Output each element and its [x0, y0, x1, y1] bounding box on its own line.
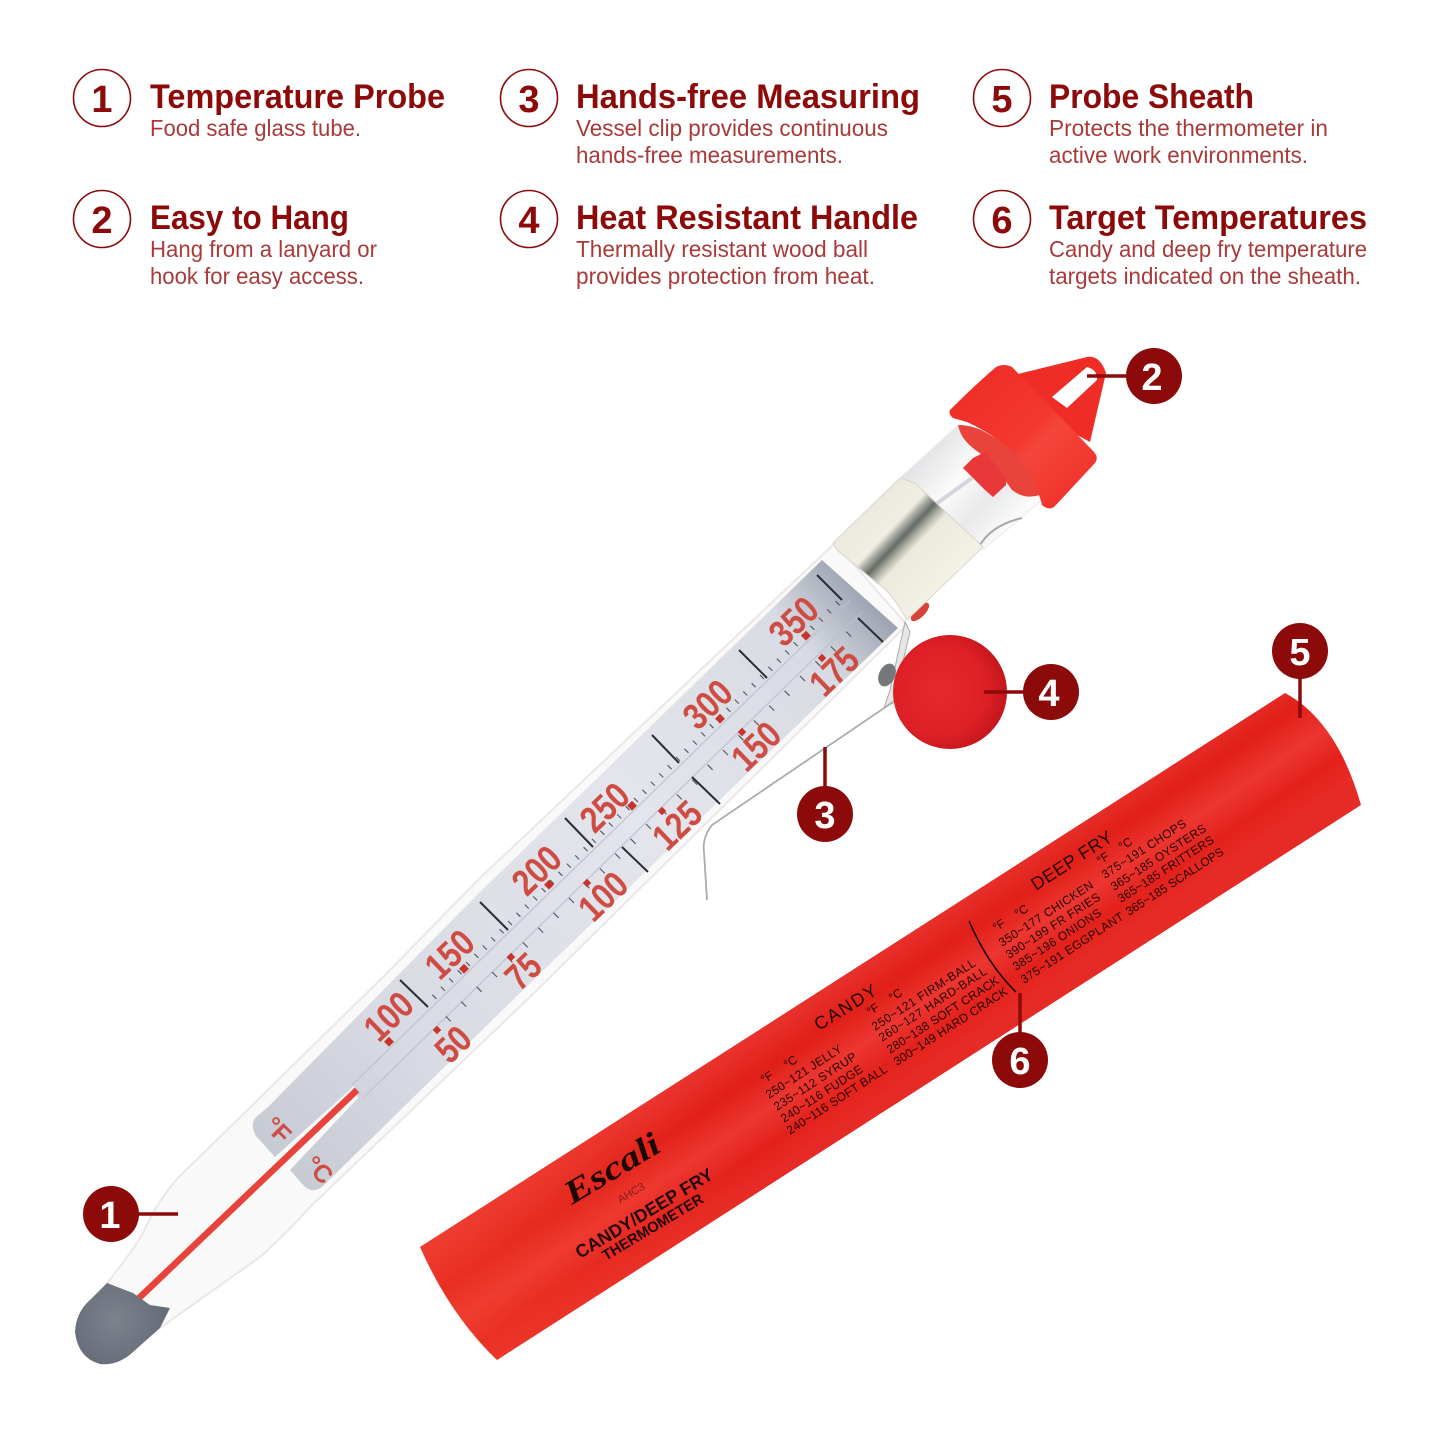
celsius scale numbers: 125: [644, 793, 710, 858]
deep fry temperature table: °F: [990, 916, 1008, 935]
candy temperature table: 300~149 HARD CRACK: [891, 984, 1010, 1069]
candy heading: CANDY: [811, 980, 880, 1034]
model number: AHC3: [616, 1181, 647, 1206]
legend item 3: hands-free measuring: Hands-free Measuring: [576, 78, 920, 116]
deep fry temperature table: 375~191 CHOPS: [1099, 816, 1189, 882]
clip top strip: [980, 518, 1022, 545]
legend item 2: easy to hang: hook for easy access.: [150, 263, 364, 289]
legend item 6: target temperatures: Target Temperatures: [1049, 199, 1367, 237]
candy temperature table: °F: [864, 1000, 882, 1019]
fahrenheit scale numbers: 350: [761, 589, 827, 654]
fahrenheit scale numbers: 300: [675, 672, 741, 737]
legend item 1: temperature probe: Food safe glass tube.: [150, 115, 361, 141]
legend item 2: easy to hang: Easy to Hang: [150, 199, 349, 237]
callout 1: 1: [99, 1195, 121, 1237]
legend item 2: easy to hang: 2: [91, 200, 113, 242]
red hint behind band: [908, 600, 932, 624]
inner red dome: [958, 425, 1040, 497]
probe tip: [75, 1283, 170, 1364]
capillary top: [925, 478, 972, 512]
deep fry heading: DEEP FRY: [1027, 827, 1116, 894]
legend item 5: probe sheath: 5: [991, 79, 1013, 121]
callout 1: [83, 1186, 178, 1242]
callout 6: [992, 993, 1048, 1088]
scale dots: [384, 631, 826, 1047]
deep fry temperature table: 390~199 FR FRIES: [1003, 890, 1103, 962]
celsius scale numbers: 75: [497, 945, 550, 998]
deep fry temperature table: 365~185 SCALLOPS: [1123, 845, 1226, 919]
legend item 4: heat resistant handle: Thermally resistant wood ball: [576, 236, 868, 262]
candy temperature table: °C: [886, 985, 905, 1005]
scale plate: [253, 560, 898, 1190]
legend item 5: probe sheath: Protects the thermometer in: [1049, 115, 1328, 141]
callout 2: 2: [1141, 357, 1163, 399]
product name: CANDY/DEEP FRY: [572, 1164, 717, 1262]
callout 4: 4: [1038, 673, 1060, 715]
thermometer: [75, 357, 1106, 1364]
major ticks: [400, 575, 883, 1007]
legend item 1: temperature probe: Temperature Probe: [150, 78, 445, 116]
legend item 5: probe sheath: Probe Sheath: [1049, 78, 1254, 116]
celsius scale numbers: 50: [427, 1018, 480, 1071]
deep fry temperature table: °C: [1116, 834, 1135, 854]
brand logo: Escali: [557, 1126, 668, 1213]
candy temperature table: [758, 956, 1010, 1138]
cap collar: [949, 365, 1097, 508]
celsius scale numbers: 150: [723, 714, 789, 779]
legend item 4: heat resistant handle: provides protection from heat.: [576, 263, 875, 289]
candy temperature table: 240~116 SOFT BALL: [784, 1062, 890, 1138]
sheath: [420, 693, 1361, 1360]
candy temperature table: 280~138 SOFT CRACK: [884, 973, 1001, 1057]
celsius scale numbers: 175: [801, 639, 867, 704]
fahrenheit minor ticks: [432, 601, 840, 999]
legend: [74, 70, 1367, 289]
legend item 2: easy to hang: Hang from a lanyard or: [150, 236, 377, 262]
callout 5: [1272, 623, 1328, 718]
fahrenheit scale numbers: 250: [572, 775, 638, 840]
legend item 5: probe sheath: [974, 70, 1328, 168]
deep fry temperature table: 375~191 EGGPLANT: [1018, 909, 1127, 987]
legend item 5: probe sheath: active work environments.: [1049, 142, 1308, 168]
deep fry temperature table: 350~177 CHICKEN: [996, 878, 1096, 950]
fahrenheit scale numbers: 100: [356, 984, 422, 1049]
celsius scale numbers: [427, 639, 867, 1071]
candy temperature table: 250~121 FIRM-BALL: [869, 956, 978, 1034]
fahrenheit scale numbers: [356, 589, 827, 1049]
clip screw: [875, 661, 899, 689]
callout 3: 3: [814, 795, 836, 837]
inner glass capillary: [352, 600, 862, 1097]
product name line 2: THERMOMETER: [599, 1191, 707, 1264]
celsius scale numbers: 100: [570, 864, 636, 929]
callout 2: [1087, 348, 1182, 404]
legend item 3: hands-free measuring: 3: [518, 79, 540, 121]
legend item 6: target temperatures: [974, 190, 1367, 289]
hanging loop: [1010, 357, 1106, 442]
metal band: [833, 478, 983, 620]
deep fry temperature table: 365~185 OYSTERS: [1108, 821, 1209, 894]
callout 6: 6: [1009, 1041, 1031, 1083]
glass body: [107, 543, 907, 1328]
table separator: [969, 921, 1016, 992]
legend item 3: hands-free measuring: Vessel clip provides continuous: [576, 115, 888, 141]
callout 4: [984, 664, 1079, 720]
deep fry temperature table: 385~196 ONIONS: [1010, 906, 1104, 974]
inner red stopper bar: [963, 452, 1006, 497]
legend item 3: hands-free measuring: hands-free measurements.: [576, 142, 843, 168]
legend item 6: target temperatures: targets indicated on the sheath.: [1049, 263, 1361, 289]
legend item 3: hands-free measuring: [500, 70, 920, 168]
deep fry temperature table: 365~185 FRITTERS: [1115, 833, 1217, 906]
candy temperature table: °F: [758, 1068, 776, 1087]
sheath body: [420, 693, 1361, 1360]
fahrenheit scale numbers: 150: [417, 922, 483, 987]
legend item 4: heat resistant handle: 4: [518, 200, 540, 242]
fahrenheit label: °F: [259, 1112, 296, 1149]
candy temperature table: 250~121 JELLY: [763, 1042, 844, 1102]
candy temperature table: 235~112 SYRUP: [771, 1049, 859, 1114]
celsius label: °C: [299, 1151, 338, 1190]
candy temperature table: 260~127 HARD-BALL: [876, 964, 990, 1045]
callout 5: 5: [1289, 632, 1311, 674]
upper glass tube: [900, 425, 1042, 550]
sheath left highlight: [420, 1055, 797, 1360]
legend item 1: temperature probe: 1: [91, 79, 113, 121]
wooden ball handle: [893, 635, 1007, 749]
legend item 4: heat resistant handle: Heat Resistant Handle: [576, 199, 918, 237]
legend item 4: heat resistant handle: [500, 190, 918, 289]
clip wire: [704, 702, 893, 900]
legend item 6: target temperatures: Candy and deep fry temperature: [1049, 236, 1367, 262]
deep fry temperature table: °C: [1012, 901, 1031, 921]
fahrenheit scale numbers: 200: [504, 838, 570, 903]
legend item 1: temperature probe: [74, 70, 445, 141]
candy temperature table: 240~116 FUDGE: [778, 1062, 865, 1126]
candy temperature table: °C: [781, 1052, 800, 1072]
legend item 2: easy to hang: [74, 190, 377, 289]
legend item 6: target temperatures: 6: [991, 200, 1013, 242]
red mercury stem: [137, 1090, 357, 1300]
callout 3: [797, 747, 853, 842]
deep fry temperature table: [990, 816, 1226, 987]
deep fry temperature table: °F: [1094, 849, 1112, 868]
clip strip: [884, 622, 910, 708]
celsius minor ticks: [446, 632, 851, 1021]
